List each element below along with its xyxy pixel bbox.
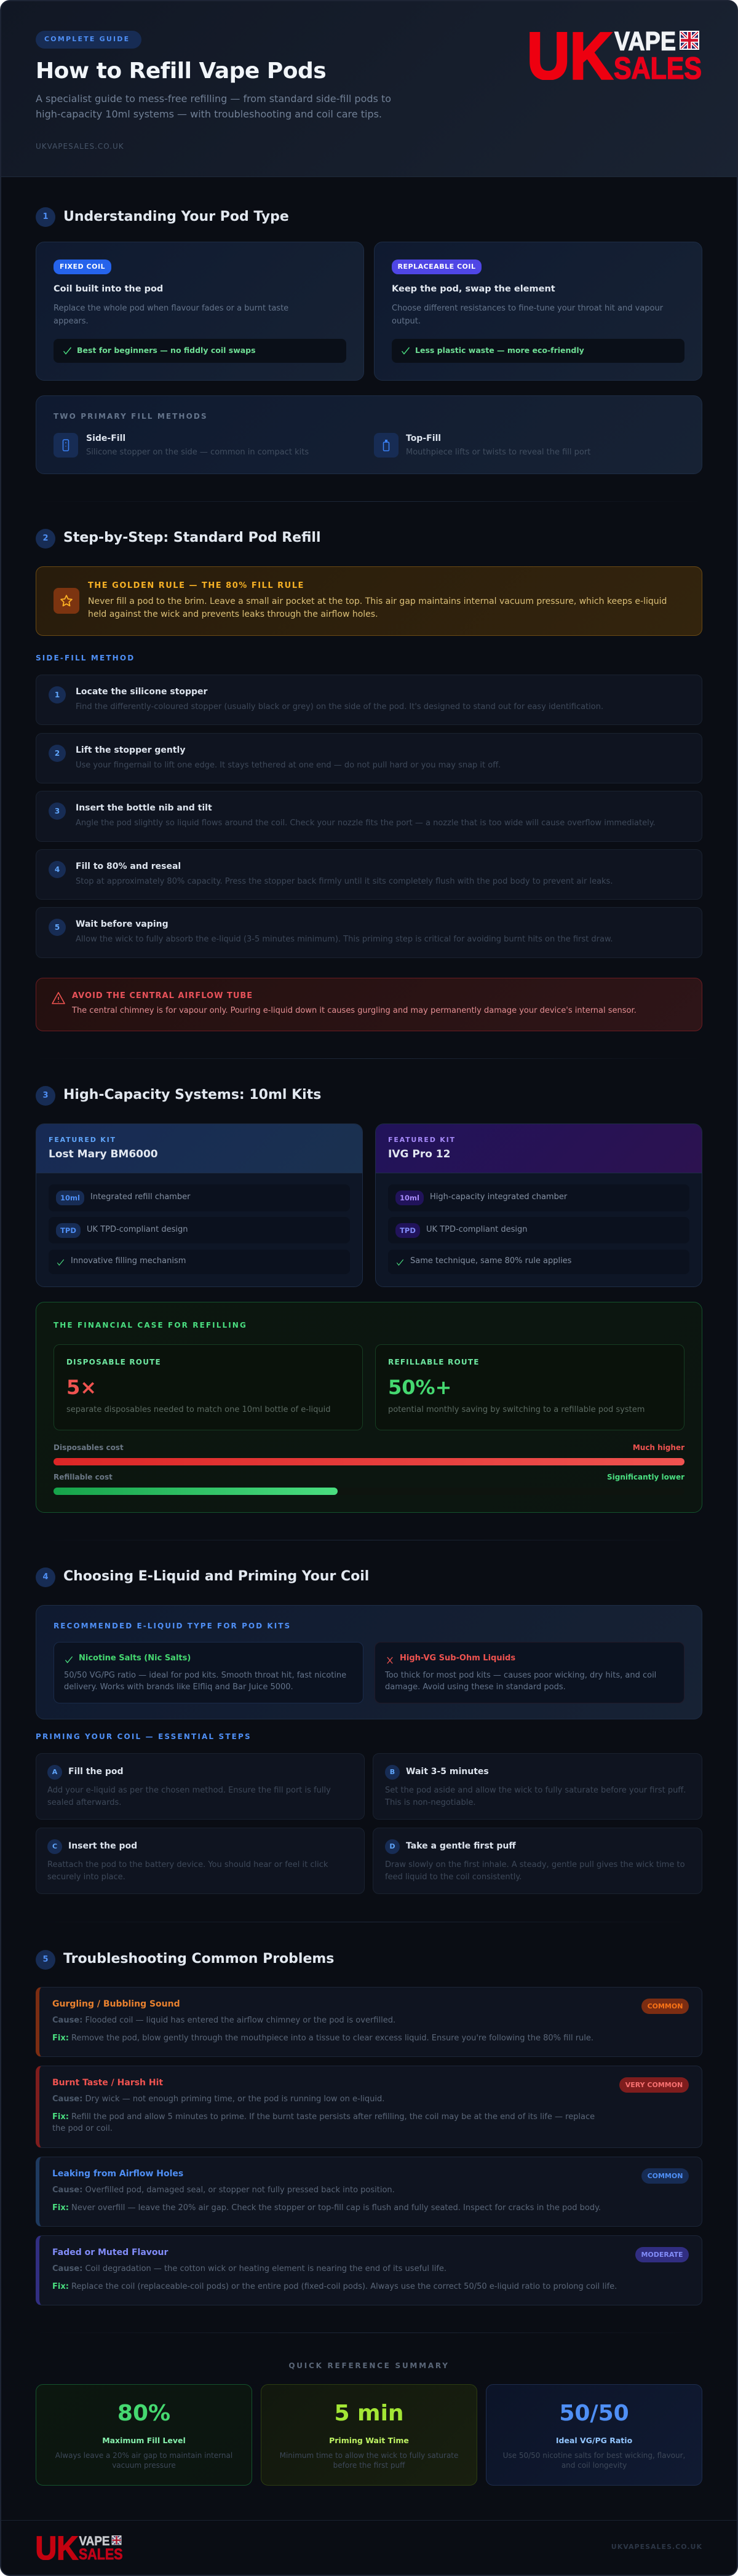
section 2 heading: [36, 529, 320, 549]
golden rule body: Never fill a pod to the brim. Leave a small air pocket at the top. This air gap maintains internal vacuum pressure, which keeps e-liquid: [88, 596, 667, 606]
feature row: 10ml: [400, 1194, 419, 1202]
step description: Allow the wick to fully absorb the e-liquid (3-5 minutes minimum). This priming step is critical for avoiding burnt hits on the first draw.: [76, 935, 613, 944]
step text: securely into place.: [47, 1873, 125, 1882]
step letter: A: [52, 1768, 57, 1776]
priming label: PRIMING YOUR COIL — ESSENTIAL STEPS: [36, 1732, 252, 1741]
step description: Use your fingernail to lift one edge. It stays tethered at one end — do not pull hard or you may snap it off.: [76, 761, 501, 770]
step text: [385, 1860, 685, 1882]
problem title: Faded or Muted Flavour: [52, 2248, 168, 2257]
kit header: [376, 1124, 703, 1173]
feature row: TPD: [60, 1226, 76, 1235]
refillable route card: potential monthly saving by switching to a refillable pod system: [388, 1405, 645, 1414]
panel: replaceable coil: [374, 242, 702, 381]
feature row: UK TPD-compliant design: [426, 1225, 527, 1234]
priming step A: [36, 1753, 365, 1820]
step letter: [47, 1839, 62, 1854]
step text: This is non-negotiable.: [385, 1798, 475, 1807]
summary heading: QUICK REFERENCE SUMMARY: [288, 2361, 450, 2370]
step letter: C: [52, 1842, 57, 1850]
section number: [36, 529, 55, 549]
footer logo: [36, 2535, 123, 2560]
step title: Wait before vaping: [76, 919, 169, 929]
severity badge: [641, 1999, 689, 2014]
step 1: [36, 675, 702, 725]
warning title: AVOID THE CENTRAL AIRFLOW TUBE: [72, 991, 253, 1001]
step number: 2: [55, 749, 60, 758]
step title: Locate the silicone stopper: [76, 687, 207, 697]
warning callout: [36, 978, 702, 1031]
panel: fill methods: Silicone stopper on the side — common in compact kits: [86, 448, 309, 457]
step title: Lift the stopper gently: [76, 745, 185, 755]
step text: Add your e-liquid as per the chosen method. Ensure the fill port is fully: [47, 1786, 331, 1795]
section number: [36, 1950, 55, 1970]
feature row: High-capacity integrated chamber: [430, 1192, 567, 1202]
step title: Fill the pod: [68, 1767, 124, 1777]
severity badge: [635, 2247, 689, 2262]
replaceable coil text: [392, 304, 663, 326]
section title: Troubleshooting Common Problems: [63, 1951, 334, 1967]
feature row: [388, 1217, 689, 1243]
section number: 2: [42, 534, 49, 543]
description: Always leave a 20% air gap to maintain internal: [55, 2451, 232, 2460]
problem: leaking: [36, 2157, 702, 2227]
step 3: [36, 791, 702, 842]
financial heading: THE FINANCIAL CASE FOR REFILLING: [54, 1321, 247, 1330]
step text: Set the pod aside and allow the wick to fully saturate before your first puff.: [385, 1786, 686, 1795]
step description: Find the differently-coloured stopper (usually black or grey) on the side of the pod. It's designed to stand out for easy identification.: [76, 702, 603, 711]
fix: Fix: Refill the pod and allow 5 minutes to prime. If the burnt taste persists after refilling, the coil may be at the end of its life — replace: [52, 2112, 595, 2122]
step letter: D: [389, 1842, 395, 1850]
section title: Step-by-Step: Standard Pod Refill: [63, 530, 320, 545]
label: Priming Wait Time: [329, 2436, 409, 2445]
header panel: [0, 0, 738, 177]
replaceable coil text: output.: [392, 317, 421, 326]
site url: UKVAPESALES.CO.UK: [36, 142, 124, 151]
replaceable coil benefit: [392, 339, 684, 363]
nicotine salts card: [54, 1642, 363, 1703]
priming step C: [36, 1828, 365, 1894]
replaceable coil tag: REPLACEABLE COIL: [398, 263, 475, 271]
fill methods label: TWO PRIMARY FILL METHODS: [54, 412, 208, 421]
bar chart: refillable cost: Significantly lower: [607, 1473, 684, 1481]
cause: Cause: Coil degradation — the cotton wick or heating element is nearing the end of its useful life.: [52, 2264, 446, 2273]
kit header: FEATURED KIT: [388, 1136, 456, 1144]
summary card: priming time: [261, 2384, 477, 2486]
step text: Draw slowly on the first inhale. A steady, gentle pull gives the wick time to: [385, 1860, 685, 1869]
step letter: [385, 1839, 400, 1854]
step text: feed liquid to the coil consistently.: [385, 1873, 522, 1882]
panel: recommended e-liquid: [36, 1605, 702, 1719]
step number: 1: [55, 691, 60, 699]
fixed coil benefit: [54, 339, 346, 363]
problem: faded flavour: [36, 2235, 702, 2305]
fix: the pod or coil.: [52, 2124, 113, 2133]
feature row: [49, 1184, 350, 1211]
problem title: Burnt Taste / Harsh Hit: [52, 2078, 163, 2088]
step title: Fill to 80% and reseal: [76, 862, 181, 871]
step text: [385, 1786, 686, 1807]
step letter: [385, 1765, 400, 1780]
guide badge: COMPLETE GUIDE: [44, 35, 130, 43]
step number: 4: [55, 865, 60, 874]
high-vg card: [375, 1642, 684, 1703]
feature row: [388, 1250, 689, 1274]
section 5 heading: [36, 1950, 334, 1970]
feature row: [49, 1217, 350, 1243]
refillable route card: REFILLABLE ROUTE: [388, 1358, 480, 1366]
kit header: FEATURED KIT: [49, 1136, 116, 1144]
kit header: IVG Pro 12: [388, 1148, 450, 1160]
fixed coil text: Replace the whole pod when flavour fades or a burnt taste: [54, 304, 288, 313]
cause: Cause: Overfilled pod, damaged seal, or stopper not fully pressed back into position.: [52, 2186, 395, 2195]
fix: Fix: Never overfill — leave the 20% air gap. Check the stopper or top-fill cap is flush and fully seated. Inspect for cracks in the pod body.: [52, 2203, 601, 2213]
panel label: RECOMMENDED E-LIQUID TYPE FOR POD KITS: [54, 1622, 291, 1630]
step description: Angle the pod slightly so liquid flows around the coil. Check your nozzle fits the port — a nozzle that is too wide will cause overflow immediately.: [76, 818, 656, 828]
step title: Insert the bottle nib and tilt: [76, 803, 212, 813]
step title: Wait 3-5 minutes: [406, 1767, 489, 1777]
priming step B: [373, 1753, 702, 1820]
step text: sealed afterwards.: [47, 1798, 121, 1807]
replaceable coil heading: Keep the pod, swap the element: [392, 284, 555, 294]
bar chart: disposables cost: [54, 1443, 684, 1465]
label: Ideal VG/PG Ratio: [556, 2436, 632, 2445]
title: How to Refill Vape Pods: [36, 58, 326, 84]
problem title: Gurgling / Bubbling Sound: [52, 1999, 180, 2009]
panel: fill methods: [36, 395, 702, 474]
step title: Insert the pod: [68, 1841, 137, 1851]
top fill text: Top-Fill: [406, 434, 441, 443]
refillable route card: 50%+: [388, 1376, 451, 1399]
bar chart: disposables cost: Much higher: [633, 1443, 684, 1452]
high-vg card: Too thick for most pod kits — causes poor wicking, dry hits, and coil: [385, 1671, 656, 1680]
description: Use 50/50 nicotine salts for best wicking, flavour,: [503, 2451, 685, 2460]
severity badge: COMMON: [648, 2002, 683, 2010]
icon: warning: [52, 992, 65, 1004]
step text: [47, 1860, 328, 1882]
icon: side fill: [54, 433, 78, 458]
golden rule body: [88, 596, 667, 619]
high-vg card: damage. Avoid using these in standard pods.: [385, 1682, 566, 1692]
cause: Cause: Dry wick — not enough priming time, or the pod is running low on e-liquid.: [52, 2094, 384, 2104]
description: and coil longevity: [561, 2461, 627, 2470]
step 2: [36, 733, 702, 783]
footer url: UKVAPESALES.CO.UK: [611, 2543, 702, 2551]
step number: [49, 745, 66, 762]
nicotine salts card: Nicotine Salts (Nic Salts): [79, 1654, 191, 1663]
severity badge: VERY COMMON: [625, 2081, 683, 2089]
section number: [36, 207, 55, 227]
section title: Choosing E-Liquid and Priming Your Coil: [63, 1569, 369, 1584]
bar chart: refillable cost: Refillable cost: [54, 1473, 113, 1481]
section 3 heading: [36, 1086, 321, 1106]
feature row: [388, 1184, 689, 1211]
disposable route card: 5×: [66, 1376, 97, 1399]
section 1 heading: [36, 207, 289, 227]
guide badge: [36, 31, 141, 49]
fixed coil benefit: Best for beginners — no fiddly coil swaps: [77, 346, 256, 355]
summary card: fill level: [36, 2384, 252, 2486]
step title: Take a gentle first puff: [406, 1841, 516, 1851]
feature row: 10ml: [60, 1194, 80, 1202]
kit header: Lost Mary BM6000: [49, 1148, 158, 1160]
fix: Fix: Replace the coil (replaceable-coil pods) or the entire pod (fixed-coil pods). Always use the correct 50/50 e-liquid ratio to prolong coil life.: [52, 2282, 617, 2291]
nicotine salts card: 50/50 VG/PG ratio — ideal for pod kits. Smooth throat hit, fast nicotine: [64, 1671, 346, 1680]
value: 5 min: [334, 2401, 404, 2426]
golden rule body: held against the wick and prevents leaks through the airflow holes.: [88, 609, 378, 619]
footer: [0, 2520, 738, 2576]
step number: 3: [55, 807, 60, 815]
high-vg card: High-VG Sub-Ohm Liquids: [400, 1654, 515, 1663]
fixed coil text: appears.: [54, 317, 89, 326]
disposable route card: separate disposables needed to match one 10ml bottle of e-liquid: [66, 1405, 331, 1414]
severity badge: COMMON: [648, 2172, 683, 2180]
logo: [528, 31, 702, 80]
icon: top fill: [374, 433, 399, 458]
feature row: UK TPD-compliant design: [87, 1225, 188, 1234]
step number: [49, 919, 66, 936]
severity badge: MODERATE: [641, 2251, 683, 2259]
summary card: ratio: [486, 2384, 702, 2486]
step number: [49, 686, 66, 703]
section 4 heading: [36, 1567, 369, 1587]
step text: Reattach the pod to the battery device. You should hear or feel it click: [47, 1860, 328, 1869]
step 4: [36, 849, 702, 900]
step letter: B: [390, 1768, 395, 1776]
value: 50/50: [559, 2401, 629, 2426]
side fill text: Side-Fill: [86, 434, 125, 443]
side fill method label: SIDE-FILL METHOD: [36, 654, 135, 662]
panel: IVG kit: [375, 1124, 702, 1287]
nicotine salts card: delivery. Works with brands like Elfliq and Bar Juice 5000.: [64, 1682, 293, 1692]
kit header: [36, 1124, 363, 1173]
severity badge: [619, 2077, 689, 2093]
description: vacuum pressure: [112, 2461, 176, 2470]
icon: star: [54, 588, 79, 614]
section number: [36, 1086, 55, 1106]
step number: [49, 861, 66, 878]
bar chart: disposables cost: Disposables cost: [54, 1443, 124, 1452]
problem title: Leaking from Airflow Holes: [52, 2169, 183, 2179]
section number: 3: [42, 1091, 49, 1100]
description: Minimum time to allow the wick to fully saturate: [280, 2451, 458, 2460]
disposable route card: [54, 1344, 363, 1430]
section number: 1: [42, 212, 49, 221]
subtitle: A specialist guide to mess-free refilling — from standard side-fill pods to: [36, 93, 391, 105]
panel: fixed coil: [36, 242, 364, 381]
step 5: [36, 907, 702, 958]
golden rule callout: [36, 566, 702, 636]
replaceable coil benefit: Less plastic waste — more eco-friendly: [415, 346, 584, 355]
section title: Understanding Your Pod Type: [63, 209, 289, 224]
label: Maximum Fill Level: [102, 2436, 186, 2445]
feature row: Same technique, same 80% rule applies: [410, 1256, 571, 1266]
section title: High-Capacity Systems: 10ml Kits: [63, 1087, 321, 1103]
fixed coil tag: FIXED COIL: [60, 263, 105, 271]
section number: 5: [42, 1955, 49, 1964]
fix: [52, 2112, 595, 2133]
refillable route card: [375, 1344, 684, 1430]
description: [280, 2451, 458, 2470]
description: before the first puff: [333, 2461, 405, 2470]
problem: gurgling: [36, 1987, 702, 2057]
value: 80%: [117, 2401, 170, 2426]
cause: Cause: Flooded coil — liquid has entered the airflow chimney or the pod is overfilled.: [52, 2016, 395, 2025]
fixed coil text: [54, 304, 288, 326]
severity badge: [641, 2168, 689, 2184]
replaceable coil text: Choose different resistances to fine-tune your throat hit and vapour: [392, 304, 663, 313]
fixed coil heading: Coil built into the pod: [54, 284, 163, 294]
disposable route card: DISPOSABLE ROUTE: [66, 1358, 161, 1366]
step description: Stop at approximately 80% capacity. Press the stopper back firmly until it sits completely flush with the pod body to prevent air leaks.: [76, 877, 613, 886]
warning body: The central chimney is for vapour only. Pouring e-liquid down it causes gurgling and may permanently damage your device's internal sensor.: [72, 1006, 637, 1015]
feature row: Innovative filling mechanism: [71, 1256, 186, 1266]
fixed coil tag: [54, 260, 111, 274]
section number: 4: [42, 1572, 49, 1582]
panel: Lost Mary kit: [36, 1124, 363, 1287]
section number: [36, 1567, 55, 1587]
replaceable coil tag: [392, 260, 482, 274]
feature row: TPD: [400, 1226, 416, 1235]
subtitle: high-capacity 10ml systems — with troubleshooting and coil care tips.: [36, 108, 382, 120]
step letter: [47, 1765, 62, 1780]
feature row: Integrated refill chamber: [90, 1192, 190, 1202]
panel: financial case: [36, 1302, 702, 1513]
priming step D: [373, 1828, 702, 1894]
golden rule title: THE GOLDEN RULE — THE 80% FILL RULE: [88, 581, 304, 590]
step number: [49, 803, 66, 820]
step number: 5: [55, 923, 60, 932]
subtitle: [36, 93, 391, 120]
bar chart: refillable cost: [54, 1473, 684, 1495]
panel: fill methods: Mouthpiece lifts or twists to reveal the fill port: [406, 448, 590, 457]
feature row: [49, 1250, 350, 1274]
description: [55, 2451, 232, 2470]
step text: [47, 1786, 331, 1807]
fix: Fix: Remove the pod, blow gently through the mouthpiece into a tissue to clear excess liquid. Ensure you're following the 80% fill rule.: [52, 2034, 593, 2043]
description: [503, 2451, 685, 2470]
problem: burnt taste: [36, 2066, 702, 2148]
